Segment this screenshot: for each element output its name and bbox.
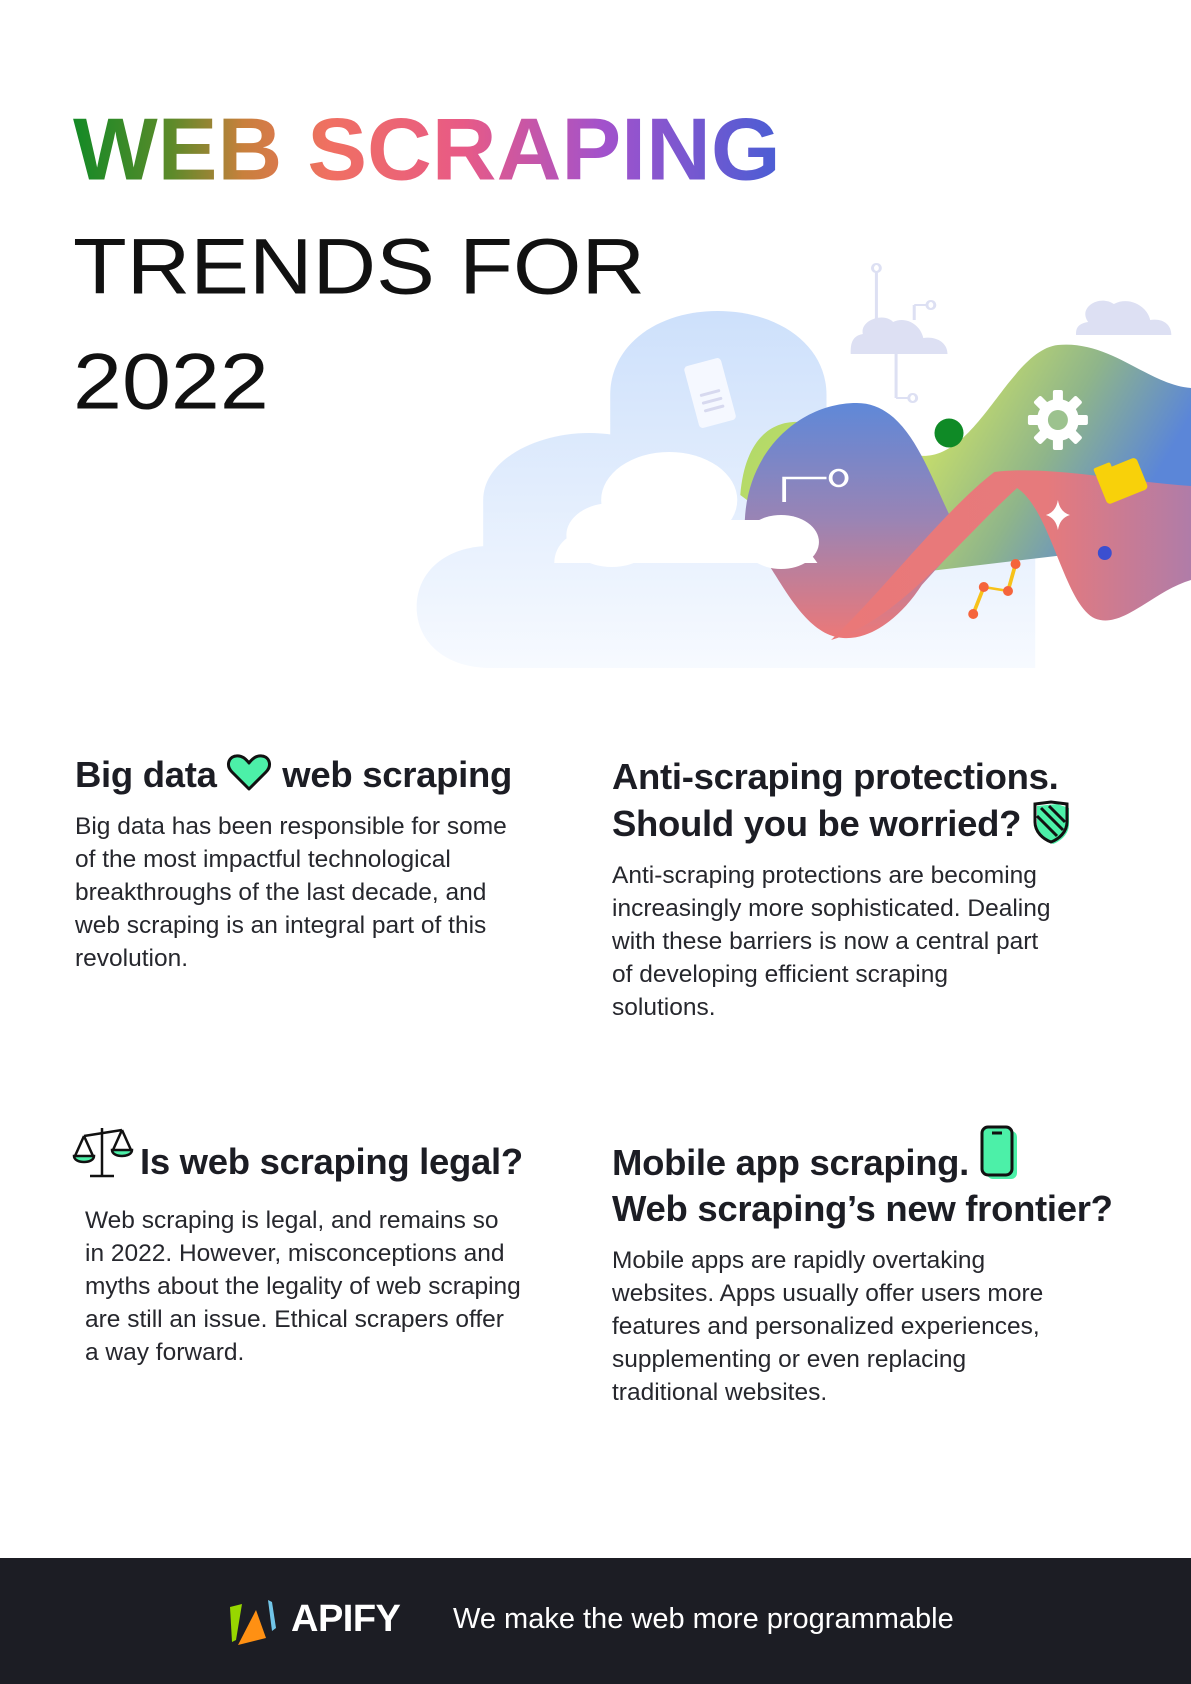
logo text: APIFY (291, 1598, 400, 1640)
body: anti-scraping: of developing efficient scraping (612, 961, 948, 988)
heading: mobile: Mobile app scraping. (612, 1142, 969, 1183)
small clouds (851, 264, 1171, 402)
body: big data: breakthroughs of the last decade, and (75, 879, 486, 906)
body: legal: Web scraping is legal, and remains so (85, 1207, 499, 1234)
body: mobile (612, 1247, 1043, 1406)
body: anti-scraping: increasingly more sophisticated. Dealing (612, 895, 1050, 922)
panel: legal (72, 1128, 523, 1366)
back wave (740, 345, 1191, 580)
heading: anti-scraping: Should you be worried? (612, 803, 1021, 844)
folder icon (1093, 452, 1149, 505)
body: legal: in 2022. However, misconceptions and (85, 1240, 504, 1267)
body: legal (85, 1207, 521, 1366)
gear icon (1028, 390, 1088, 450)
body: big data: web scraping is an integral part of this (75, 912, 486, 939)
body: big data: Big data has been responsible for some (75, 813, 507, 840)
panel: anti-scraping (612, 756, 1069, 1021)
illustration: clouds and data wave (416, 263, 1191, 668)
green dot (934, 418, 964, 448)
heading: mobile: Web scraping’s new frontier? (612, 1188, 1113, 1229)
heading: anti-scraping: Anti-scraping protections. (612, 756, 1058, 797)
icon: apify logo (230, 1600, 276, 1645)
body: anti-scraping: Anti-scraping protections are becoming (612, 862, 1037, 889)
footer (0, 1558, 1191, 1684)
title (73, 101, 781, 426)
document icon (683, 357, 737, 429)
body: mobile: Mobile apps are rapidly overtaking (612, 1247, 985, 1274)
body: anti-scraping: solutions. (612, 994, 716, 1021)
title line 2: TRENDS FOR (73, 222, 645, 311)
body: legal: are still an issue. Ethical scrapers offer (85, 1306, 504, 1333)
body: mobile: features and personalized experiences, (612, 1313, 1040, 1340)
red wave (831, 470, 1191, 640)
big light cloud (417, 311, 1035, 668)
title line 1: WEB SCRAPING (73, 101, 781, 199)
body: anti-scraping (612, 862, 1050, 1021)
body: mobile: traditional websites. (612, 1379, 827, 1406)
body: legal: myths about the legality of web scraping (85, 1273, 521, 1300)
icon: scales (72, 1128, 134, 1178)
heading: mobile (612, 1126, 1113, 1229)
tagline: We make the web more programmable (453, 1603, 954, 1635)
sparkle (1046, 500, 1070, 530)
body: legal: a way forward. (85, 1339, 244, 1366)
panel: mobile (612, 1126, 1113, 1406)
panel: big data (75, 754, 512, 972)
body: big data: of the most impactful technological (75, 846, 451, 873)
heading: big data: Big data web scraping (75, 754, 512, 795)
white cloud (554, 452, 819, 569)
body: mobile: websites. Apps usually offer users more (612, 1280, 1043, 1307)
blue dot (1098, 546, 1112, 560)
title line 3: 2022 (73, 336, 269, 426)
connector (784, 470, 847, 502)
body: mobile: supplementing or even replacing (612, 1346, 966, 1373)
body: big data (75, 813, 507, 972)
heading: legal: Is web scraping legal? (140, 1141, 523, 1182)
body: big data: revolution. (75, 945, 188, 972)
molecule (968, 559, 1021, 619)
body: anti-scraping: with these barriers is now a central part (612, 928, 1038, 955)
heading: anti-scraping (612, 756, 1069, 844)
front hump (745, 403, 963, 638)
